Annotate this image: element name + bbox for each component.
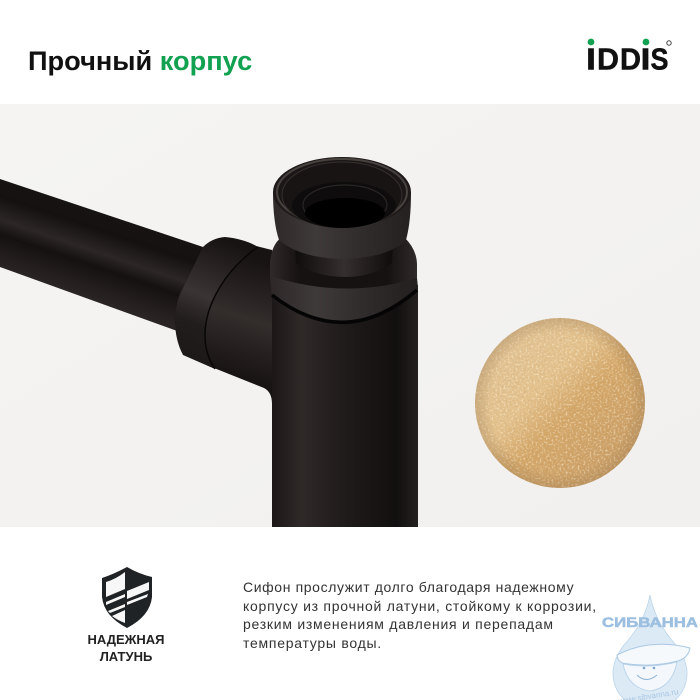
lower ring	[270, 238, 418, 322]
product photo panel	[0, 104, 700, 527]
watermark: sibvanna	[602, 594, 698, 700]
logo: iddis: S	[650, 42, 668, 76]
pipe	[0, 179, 206, 332]
description text: резким изменениям давления и перепадам	[243, 616, 554, 632]
title: Прочный корпус	[28, 45, 252, 76]
elbow	[205, 246, 290, 420]
shield label	[87, 632, 165, 664]
description text: Сифон прослужит долго благодаря надежному	[243, 579, 574, 595]
elbow collar	[175, 237, 258, 369]
description text: температуры воды.	[243, 635, 382, 651]
top coupling	[273, 157, 411, 259]
logo: iddis	[586, 38, 672, 76]
logo: iddis: I	[640, 42, 650, 76]
shield icon	[102, 567, 152, 628]
logo: iddis: D	[597, 42, 619, 76]
description text: корпусу из прочной латуни, стойкому к коррозии,	[243, 598, 597, 614]
logo: iddis: I	[586, 42, 596, 76]
neck	[295, 245, 393, 277]
description text	[243, 579, 597, 651]
brass sphere sample	[475, 318, 645, 488]
shield label: ЛАТУНЬ	[100, 649, 152, 664]
watermark: sibvanna: СИБВАННА	[602, 615, 698, 630]
vertical body	[272, 285, 418, 527]
logo: iddis: D	[620, 42, 641, 76]
shield label: НАДЕЖНАЯ	[87, 632, 165, 647]
